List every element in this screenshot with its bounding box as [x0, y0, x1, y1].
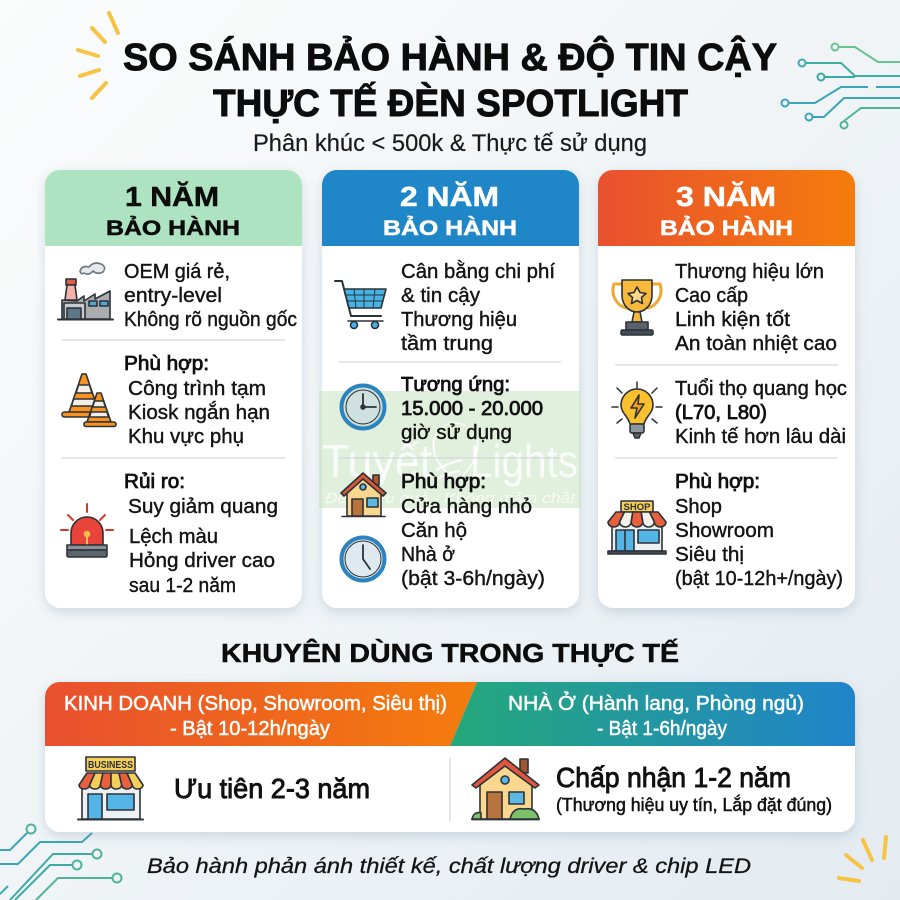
header: 1 year: [45, 170, 302, 246]
text: balance: tầm trung: [401, 333, 493, 355]
text: brand: Cao cấp: [675, 285, 748, 307]
icon: trophy: [613, 280, 661, 335]
icon: light bulb: [612, 382, 662, 438]
watermark band: [319, 391, 581, 508]
text: hours: Tương ứng:: [401, 374, 510, 396]
text: risks: Rủi ro:: [124, 471, 185, 493]
text: OEM: OEM giá rẻ,: [124, 261, 230, 283]
text: accept: Chấp nhận 1-2 năm: [556, 762, 791, 793]
text: home header: [508, 691, 804, 740]
title: [123, 34, 777, 125]
panel: 2 year warranty: [319, 170, 581, 608]
icon: clock: [342, 538, 384, 580]
heading: bảo hành: BẢO HÀNH: [106, 217, 240, 240]
text: suitable: Phù hợp:: [124, 353, 209, 375]
text: lifetime: Kinh tế hơn lâu dài: [675, 426, 846, 448]
heading: bảo hành: BẢO HÀNH: [383, 217, 517, 240]
icon: house: [341, 473, 386, 516]
decoration: sunburst top left: [78, 13, 118, 98]
header: 3 year: [598, 170, 855, 246]
text: brand: An toàn nhiệt cao: [675, 333, 837, 355]
text: hours: [401, 374, 543, 444]
text: lifetime: Tuổi thọ quang học: [675, 378, 847, 400]
decoration: sunburst bottom right: [839, 837, 886, 881]
text: business header: KINH DOANH (Shop, Showroom, Siêu thị): [64, 693, 447, 715]
text: balance: [401, 260, 555, 355]
header: home: [450, 682, 855, 746]
icon: business shop: BUSINESS: [88, 759, 133, 771]
text: suitable: Căn hộ: [401, 520, 467, 542]
text: balance: Thương hiệu: [401, 309, 517, 331]
text: accept: [556, 762, 832, 815]
text: suitable: Công trình tạm: [128, 378, 266, 400]
text: business header: [64, 693, 447, 740]
icon: shop: [608, 501, 666, 554]
header: business: [45, 682, 477, 746]
text: suitable: [675, 471, 843, 590]
panel: recommendation: [45, 682, 855, 832]
text: suitable: Kiosk ngắn hạn: [128, 401, 270, 424]
heading: practical recommendation: KHUYÊN DÙNG TRONG THỰC TẾ: [221, 638, 679, 668]
watermark band: Đèn hiệu quả - Không giảm chất: [325, 490, 576, 507]
icon: traffic cones: [62, 374, 116, 426]
text: suitable: Phù hợp:: [675, 471, 760, 493]
watermark band: Tuyết: [322, 435, 432, 487]
text: risks: [124, 471, 278, 597]
watermark band: Lights: [470, 435, 578, 487]
icon: shop: SHOP: [624, 502, 650, 512]
icon: business shop: [78, 757, 143, 820]
text: suitable: [124, 353, 270, 448]
text: suitable: (bật 3-6h/ngày): [401, 568, 545, 590]
text: balance: & tin cậy: [401, 285, 480, 307]
text: OEM: Không rõ nguồn gốc: [124, 309, 297, 331]
text: accept: (Thương hiệu uy tín, Lắp đặt đúng): [556, 794, 832, 815]
text: risks: Suy giảm quang: [128, 496, 278, 518]
subtitle: Phân khúc < 500k & Thực tế sử dụng: [253, 130, 647, 157]
text: suitable: Showroom: [675, 520, 774, 542]
text: brand: [675, 261, 837, 355]
heading: 1 năm: 1 NĂM: [125, 181, 219, 212]
icon: large house: [472, 758, 539, 820]
icon: wall clock: [342, 386, 384, 428]
panel: 1 year warranty: [45, 170, 302, 608]
text: business header: - Bật 10-12h/ngày: [170, 718, 330, 740]
heading: 3 năm: 3 NĂM: [676, 181, 776, 212]
text: risks: Hỏng driver cao: [129, 550, 275, 572]
text: brand: Thương hiệu lớn: [675, 261, 824, 283]
header: 2 year: [322, 170, 579, 246]
icon: alarm siren: [61, 504, 113, 557]
text: suitable: (bật 10-12h+/ngày): [675, 568, 843, 590]
heading: bảo hành: BẢO HÀNH: [660, 217, 793, 240]
text: suitable: Khu vực phụ: [128, 426, 244, 448]
text: balance: Cân bằng chi phí: [401, 260, 555, 283]
text: hours: giờ sử dụng: [401, 422, 512, 444]
text: home header: - Bật 1-6h/ngày: [597, 718, 727, 740]
text: hours: 15.000 - 20.000: [401, 398, 543, 420]
heading: 2 năm: 2 NĂM: [400, 181, 499, 212]
text: brand: Linh kiện tốt: [675, 309, 790, 331]
decoration: circuit top right: [782, 44, 900, 128]
icon: factory: [58, 263, 113, 320]
title: SO SÁNH BẢO HÀNH & ĐỘ TIN CẬY: [123, 34, 777, 79]
text: suitable: Nhà ở: [401, 544, 455, 566]
text: suitable: [401, 471, 545, 590]
text: risks: Lệch màu: [129, 526, 218, 548]
text: OEM: entry-level: [124, 285, 222, 307]
text: priority: Ưu tiên 2-3 năm: [174, 773, 370, 804]
text: lifetime: [675, 378, 847, 448]
text: lifetime: (L70, L80): [675, 402, 767, 424]
decoration: circuit bottom left: [0, 824, 122, 900]
text: risks: sau 1-2 năm: [129, 575, 236, 597]
title: THỰC TẾ ĐÈN SPOTLIGHT: [213, 81, 688, 125]
text: suitable: Phù hợp:: [401, 471, 486, 493]
text: suitable: Shop: [675, 496, 722, 518]
text: suitable: Cửa hàng nhỏ: [401, 496, 532, 518]
text: suitable: Siêu thị: [675, 544, 744, 566]
panel: 3 year warranty: [598, 170, 855, 608]
text: home header: NHÀ Ở (Hành lang, Phòng ngủ): [508, 691, 804, 715]
text: OEM: [124, 261, 297, 331]
footer note: Bảo hành phản ánh thiết kế, chất lượng driver & chip LED: [147, 855, 751, 878]
icon: shopping cart: [335, 281, 386, 328]
